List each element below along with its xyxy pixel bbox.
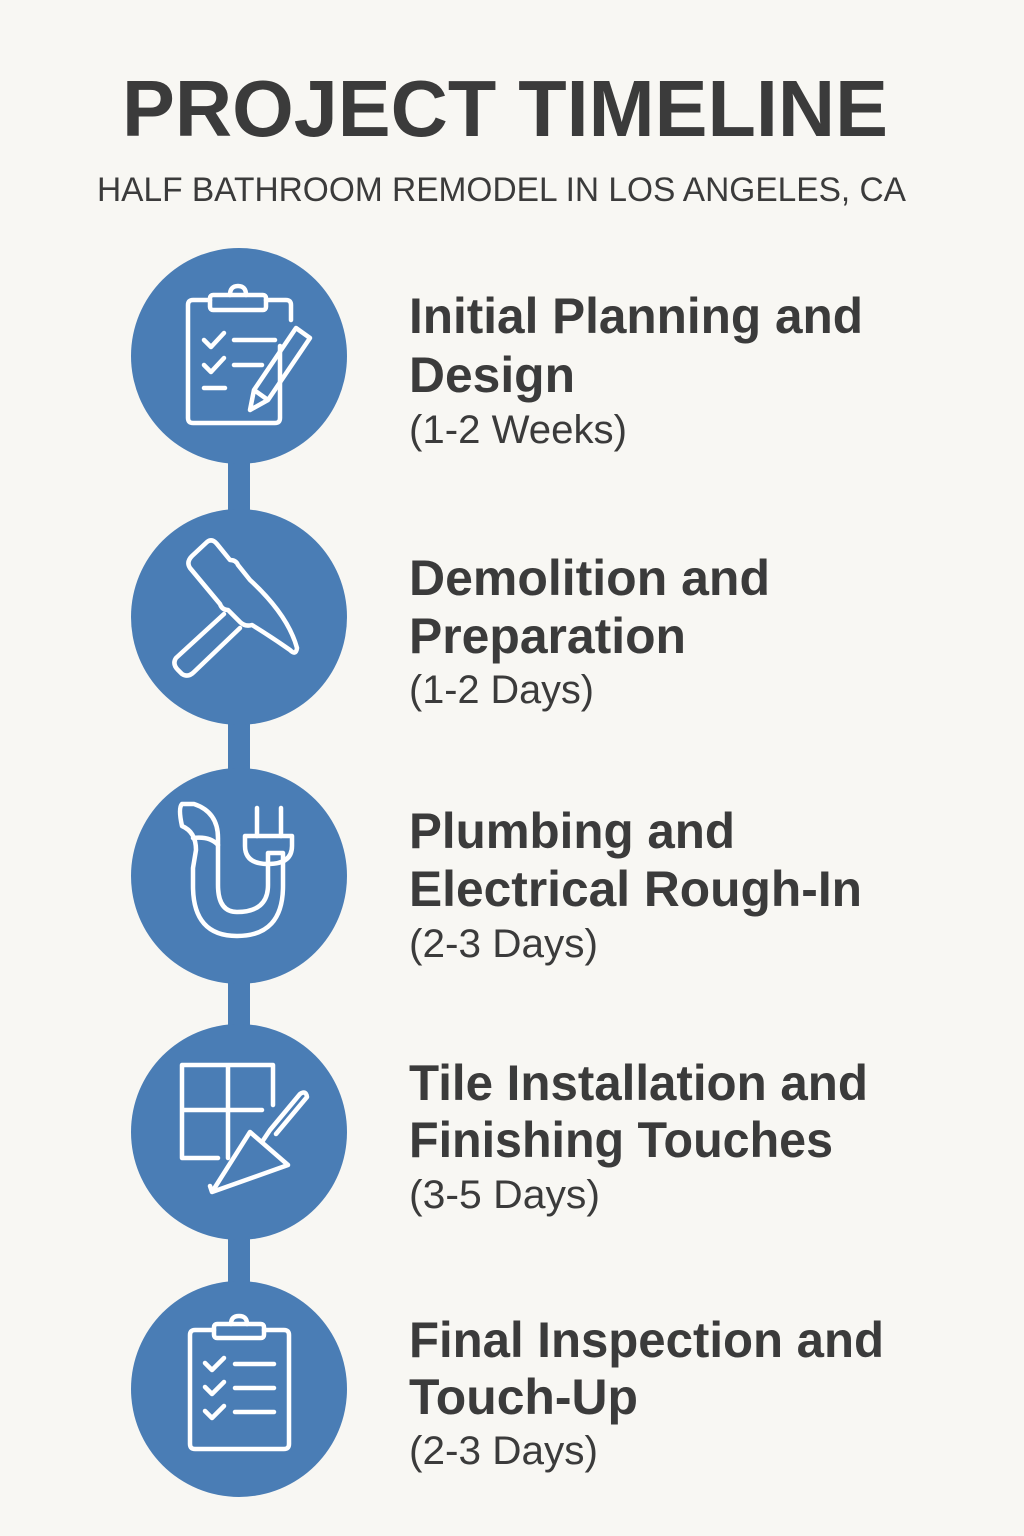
step 1 text: (1-2 Weeks) — [409, 408, 627, 452]
step 2 circle — [131, 509, 347, 725]
step 5 text: (2-3 Days) — [409, 1429, 598, 1473]
step 5 circle — [131, 1281, 347, 1497]
icon: clipboard with pencil — [188, 286, 310, 423]
icon: pipe and plug — [180, 804, 292, 936]
step 3 text: (2-3 Days) — [409, 922, 598, 966]
step 2 text: Preparation — [409, 608, 686, 664]
step 5 text — [409, 1312, 884, 1473]
icon: checklist clipboard — [190, 1316, 289, 1449]
step 4 text: (3-5 Days) — [409, 1173, 600, 1217]
step 4 text: Finishing Touches — [409, 1112, 833, 1168]
step 4 text — [409, 1055, 868, 1217]
step 5 text: Final Inspection and — [409, 1312, 884, 1368]
step 2 text — [409, 550, 770, 712]
step 3 text: Electrical Rough-In — [409, 861, 862, 917]
timeline connector — [228, 400, 250, 1350]
title: PROJECT TIMELINE — [122, 64, 888, 153]
step 3 circle — [131, 768, 347, 984]
step 3 text — [409, 803, 862, 966]
step 1 text: Design — [409, 347, 575, 403]
step 4 circle — [131, 1024, 347, 1240]
step 1 text — [409, 288, 863, 452]
step 2 text: (1-2 Days) — [409, 668, 594, 712]
step 4 text: Tile Installation and — [409, 1055, 868, 1111]
step 1 text: Initial Planning and — [409, 288, 863, 344]
icon: hammer — [174, 540, 297, 676]
step 1 circle — [131, 248, 347, 464]
step 3 text: Plumbing and — [409, 803, 735, 859]
step 5 text: Touch-Up — [409, 1369, 638, 1425]
icon: tiles and trowel — [182, 1065, 307, 1192]
subtitle: HALF BATHROOM REMODEL IN LOS ANGELES, CA — [97, 171, 906, 209]
step 2 text: Demolition and — [409, 550, 770, 606]
